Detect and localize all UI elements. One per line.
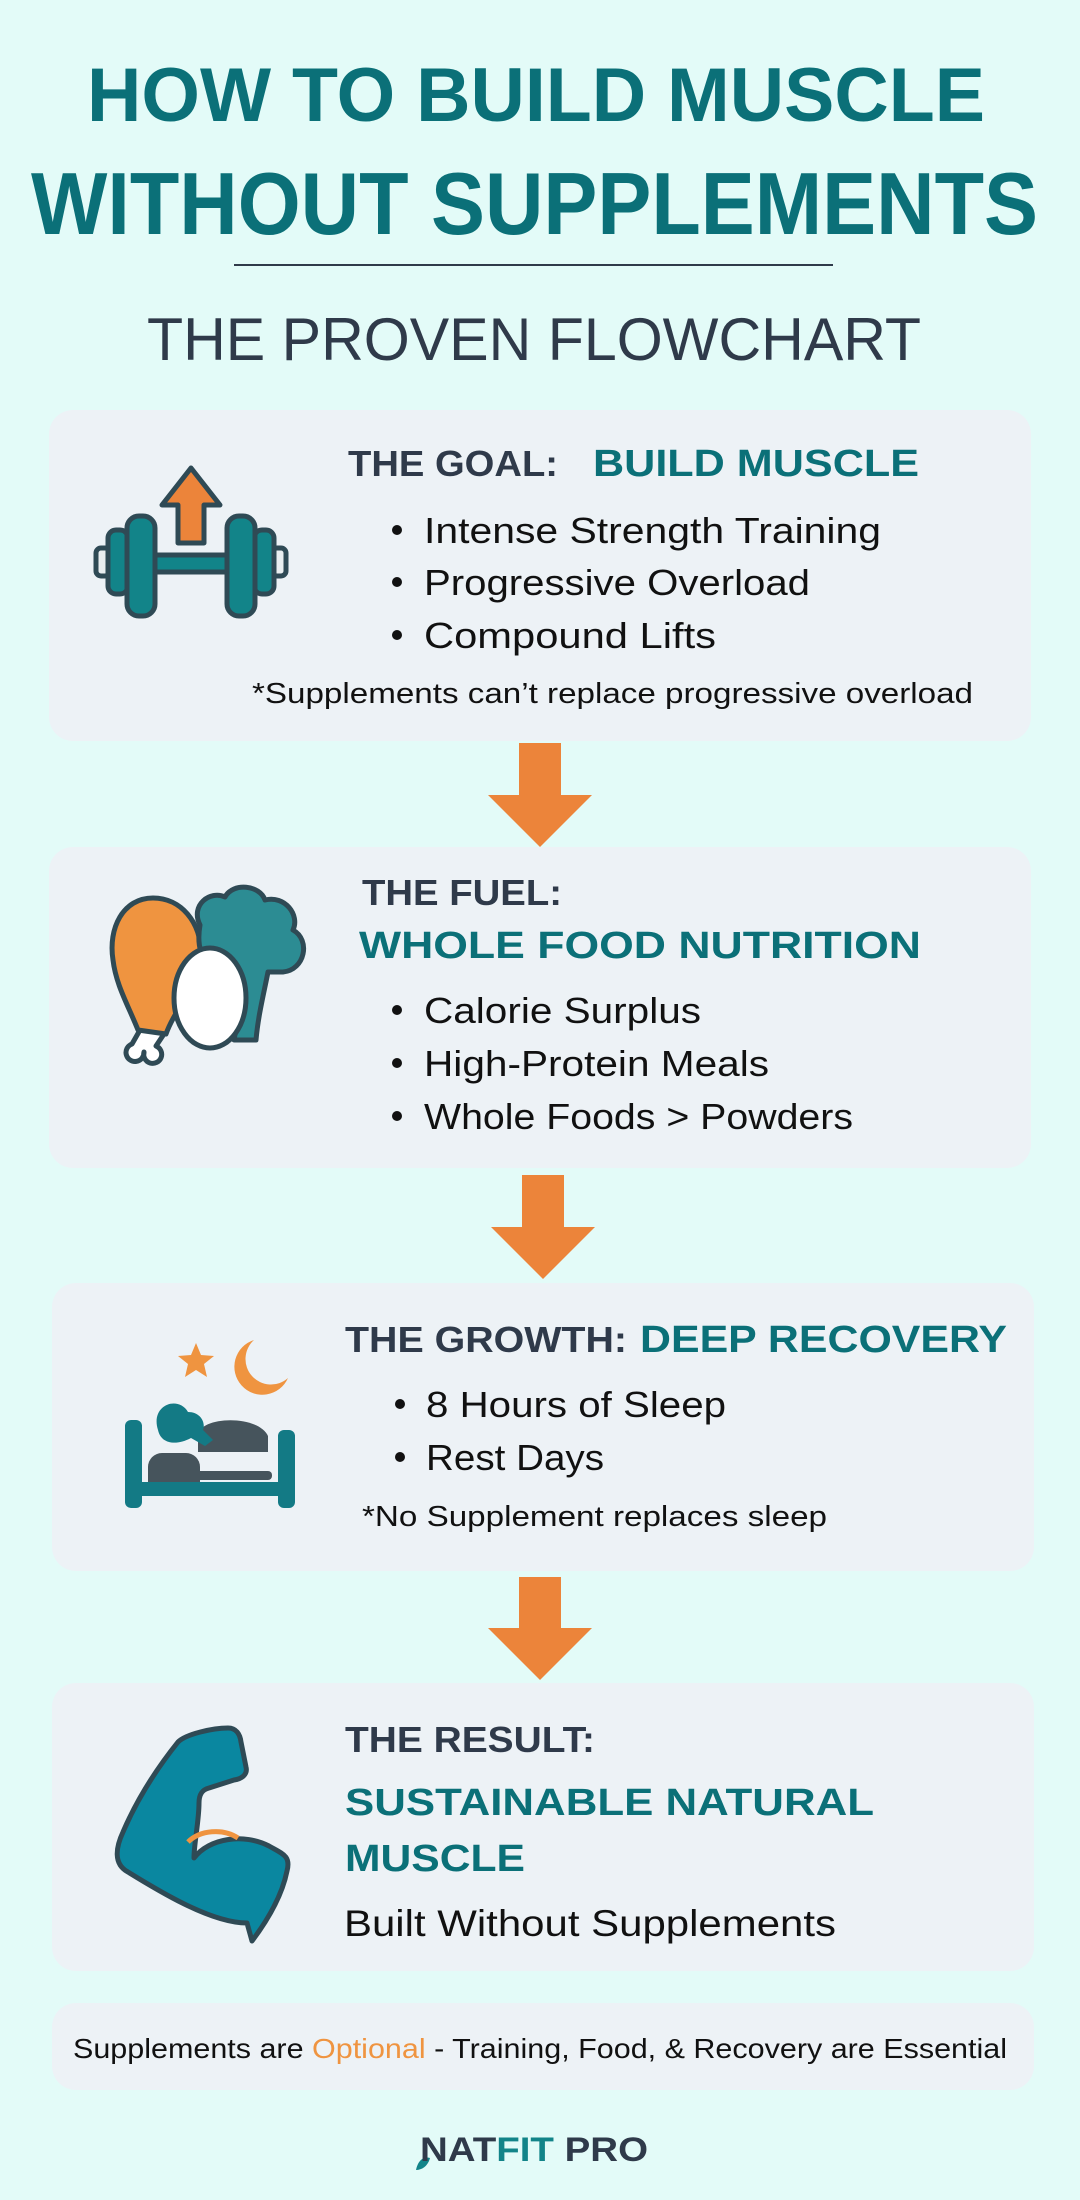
icon: dumbbell xyxy=(96,468,286,616)
bullets: goal xyxy=(392,510,881,656)
panel: fuel xyxy=(49,847,1031,1168)
panel: fuel: WHOLE FOOD NUTRITION xyxy=(359,925,921,967)
heading: result: THE RESULT: xyxy=(345,1719,595,1760)
bullets: growth: 8 Hours of Sleep xyxy=(426,1384,726,1425)
panel: goal: BUILD MUSCLE xyxy=(593,443,919,485)
note: growth: *No Supplement replaces sleep xyxy=(362,1501,827,1533)
bullets: growth xyxy=(395,1384,726,1478)
arrow 2 xyxy=(491,1175,595,1279)
title: HOW TO BUILD MUSCLE xyxy=(87,53,985,138)
subtitle: THE PROVEN FLOWCHART xyxy=(147,306,921,373)
bullets: fuel: Calorie Surplus xyxy=(424,990,701,1031)
panel: result: SUSTAINABLE NATURAL xyxy=(345,1782,874,1824)
bullets: goal: Intense Strength Training xyxy=(424,510,881,551)
bullets: goal: Compound Lifts xyxy=(424,615,716,656)
icon: food xyxy=(112,887,304,1063)
panel: growth xyxy=(52,1283,1034,1571)
bullets: fuel xyxy=(392,990,853,1137)
note: goal: *Supplements can’t replace progressive overload xyxy=(252,678,973,710)
arrow 3 xyxy=(488,1577,592,1680)
panel: result xyxy=(52,1683,1034,1971)
bullets: fuel: Whole Foods > Powders xyxy=(424,1096,853,1137)
title xyxy=(31,53,1038,253)
icon: bed xyxy=(125,1340,295,1508)
panel: growth: DEEP RECOVERY xyxy=(640,1319,1007,1361)
panel: result: MUSCLE xyxy=(345,1838,525,1880)
panel: goal xyxy=(49,410,1031,741)
logo: NAT FIT PRO xyxy=(420,2131,648,2169)
footer callout xyxy=(52,2003,1034,2090)
heading: fuel: THE FUEL: xyxy=(362,872,562,913)
text: result: Built Without Supplements xyxy=(344,1903,836,1944)
bullets: fuel: High-Protein Meals xyxy=(424,1043,769,1084)
arrow 1 xyxy=(488,743,592,847)
bullets: goal: Progressive Overload xyxy=(424,562,810,603)
heading: growth: THE GROWTH: xyxy=(345,1319,627,1360)
footer callout: Supplements are Optional - Training, Food, & Recovery are Essential xyxy=(73,2033,1007,2064)
bullets: growth: Rest Days xyxy=(426,1437,604,1478)
heading: goal: THE GOAL: xyxy=(348,443,558,484)
icon: flexed arm xyxy=(117,1728,288,1941)
